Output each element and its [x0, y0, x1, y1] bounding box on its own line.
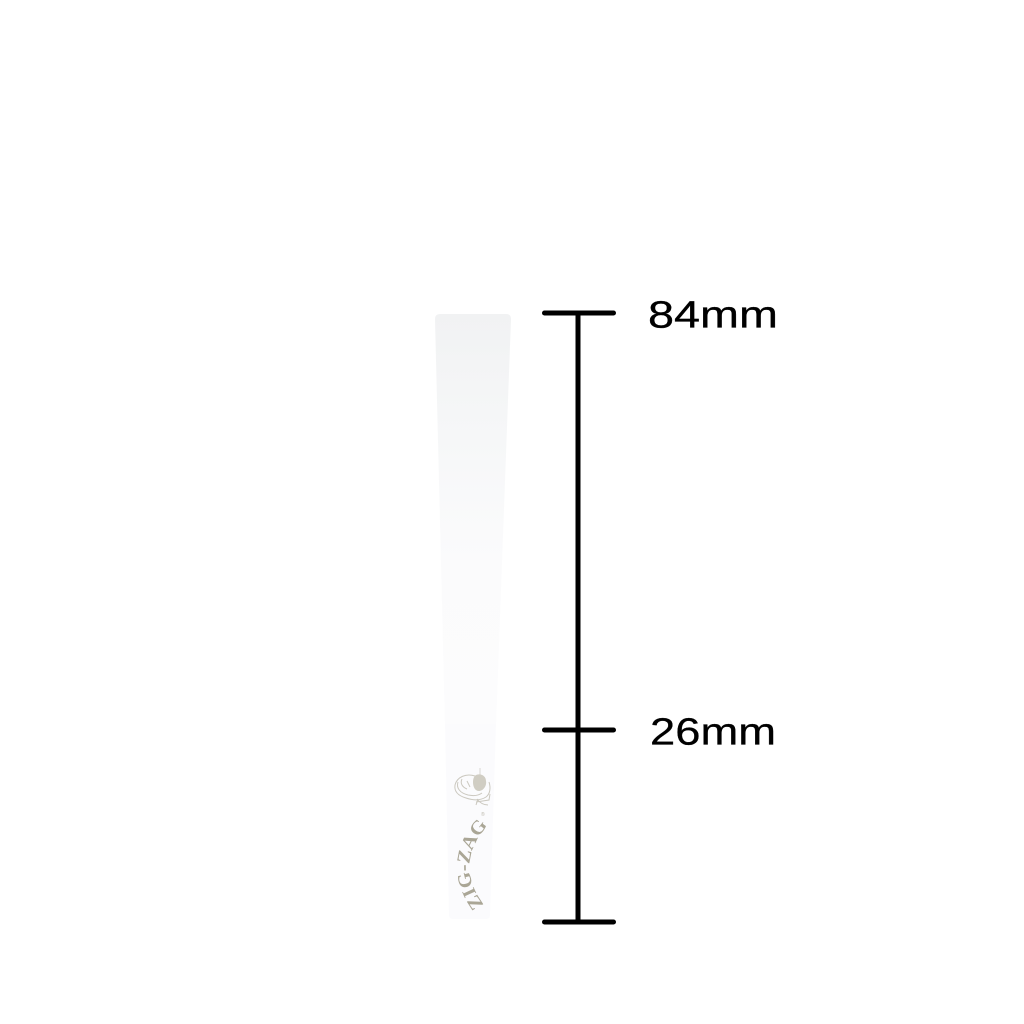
registered mark: ® [481, 811, 485, 818]
cone [435, 314, 511, 910]
brand text: ZIG-ZAG [457, 820, 486, 910]
label: 26mm: 26mm [650, 712, 776, 754]
cone filter tip [445, 724, 496, 919]
label: 84mm: 84mm [648, 294, 778, 336]
dimension scale [544, 313, 614, 924]
bottom tick [544, 920, 614, 924]
icon: brand logo figure [455, 768, 490, 805]
cone paper body [435, 314, 511, 725]
vertical line [576, 313, 580, 924]
middle tick [544, 728, 614, 732]
top tick [544, 310, 614, 316]
